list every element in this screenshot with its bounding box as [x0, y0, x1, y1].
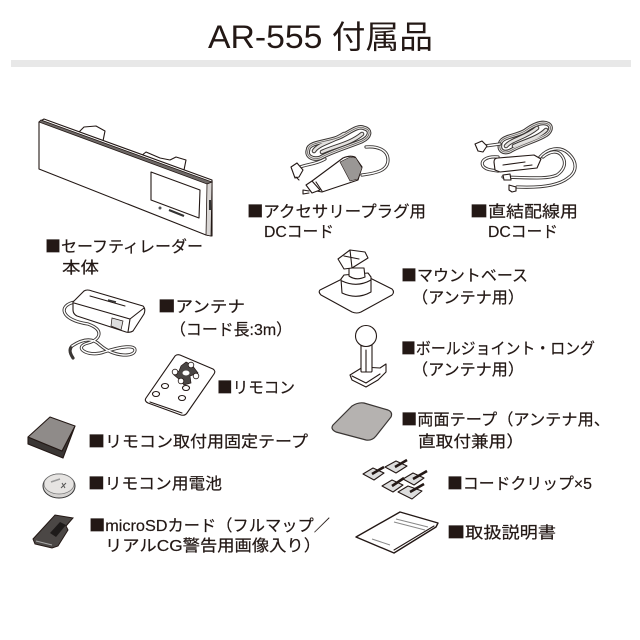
item: double-sided tape — [332, 403, 610, 451]
label: ball joint long: （アンテナ用） — [412, 361, 524, 379]
label: ball joint long: ■ボールジョイント・ロング — [401, 335, 595, 359]
label: microSD card: リアルCG警告用画像入り） — [105, 537, 321, 555]
label: safety radar unit: ■セーフティレーダー — [45, 233, 203, 257]
item: mount base — [319, 250, 528, 313]
item: remote battery — [43, 470, 222, 498]
item: instruction manual — [356, 512, 556, 553]
label: direct wiring DC cord: DCコード — [488, 224, 558, 241]
label: safety radar unit — [45, 233, 203, 277]
label: instruction manual: ■取扱説明書 — [447, 519, 556, 543]
label: double-sided tape: 直取付兼用） — [418, 433, 524, 451]
label: double-sided tape: ■両面テープ（アンテナ用、 — [401, 406, 610, 430]
label: cord clips: ■コードクリップ×5 — [447, 470, 592, 494]
item: safety radar unit — [39, 119, 212, 277]
icon: direct wiring cord — [475, 123, 575, 192]
icon: cord clips — [363, 460, 427, 499]
item: microSD card — [33, 512, 330, 555]
title: AR-555 付属品 — [208, 19, 433, 55]
item: accessory plug DC cord — [247, 127, 426, 241]
item: cord clips — [363, 460, 592, 499]
label: accessory plug DC cord: ■アクセサリープラグ用 — [247, 198, 426, 222]
label: ball joint long — [401, 335, 595, 379]
label: remote control: ■リモコン — [217, 374, 295, 398]
item: antenna — [64, 290, 292, 358]
label: mount base: （アンテナ用） — [412, 289, 524, 307]
icon: remote control — [145, 355, 215, 415]
icon: mount base — [319, 250, 394, 313]
label: mount base — [401, 262, 528, 307]
item: direct wiring DC cord — [470, 123, 578, 241]
icon: microSD card — [33, 515, 73, 548]
item: remote control — [145, 355, 295, 415]
label: direct wiring DC cord: ■直結配線用 — [470, 198, 578, 222]
item: remote mounting tape — [28, 417, 308, 458]
icon: coin battery — [43, 474, 75, 498]
icon: mirror radar — [39, 119, 212, 236]
label: direct wiring DC cord — [470, 198, 578, 241]
label: remote battery: ■リモコン用電池 — [88, 470, 222, 494]
label: safety radar unit: 本体 — [62, 259, 99, 277]
label: antenna: （コード長:3m） — [170, 321, 292, 339]
icon: antenna — [64, 290, 145, 358]
label: accessory plug DC cord — [247, 198, 426, 241]
icon: ball joint — [350, 326, 386, 387]
label: mount base: ■マウントベース — [401, 262, 528, 286]
label: microSD card — [89, 512, 330, 555]
label: antenna: ■アンテナ — [158, 293, 245, 317]
icon: accessory plug cord — [291, 127, 388, 194]
label: antenna — [158, 293, 292, 339]
label: remote mounting tape: ■リモコン取付用固定テープ — [88, 428, 308, 452]
label: microSD card: ■microSDカード（フルマップ／ — [89, 512, 330, 536]
item: ball joint long — [350, 326, 595, 387]
icon: adhesive pad — [332, 403, 392, 440]
label: accessory plug DC cord: DCコード — [264, 224, 334, 241]
icon: tape pack — [28, 417, 75, 458]
label: double-sided tape — [401, 406, 610, 451]
icon: manual booklet — [356, 512, 438, 553]
